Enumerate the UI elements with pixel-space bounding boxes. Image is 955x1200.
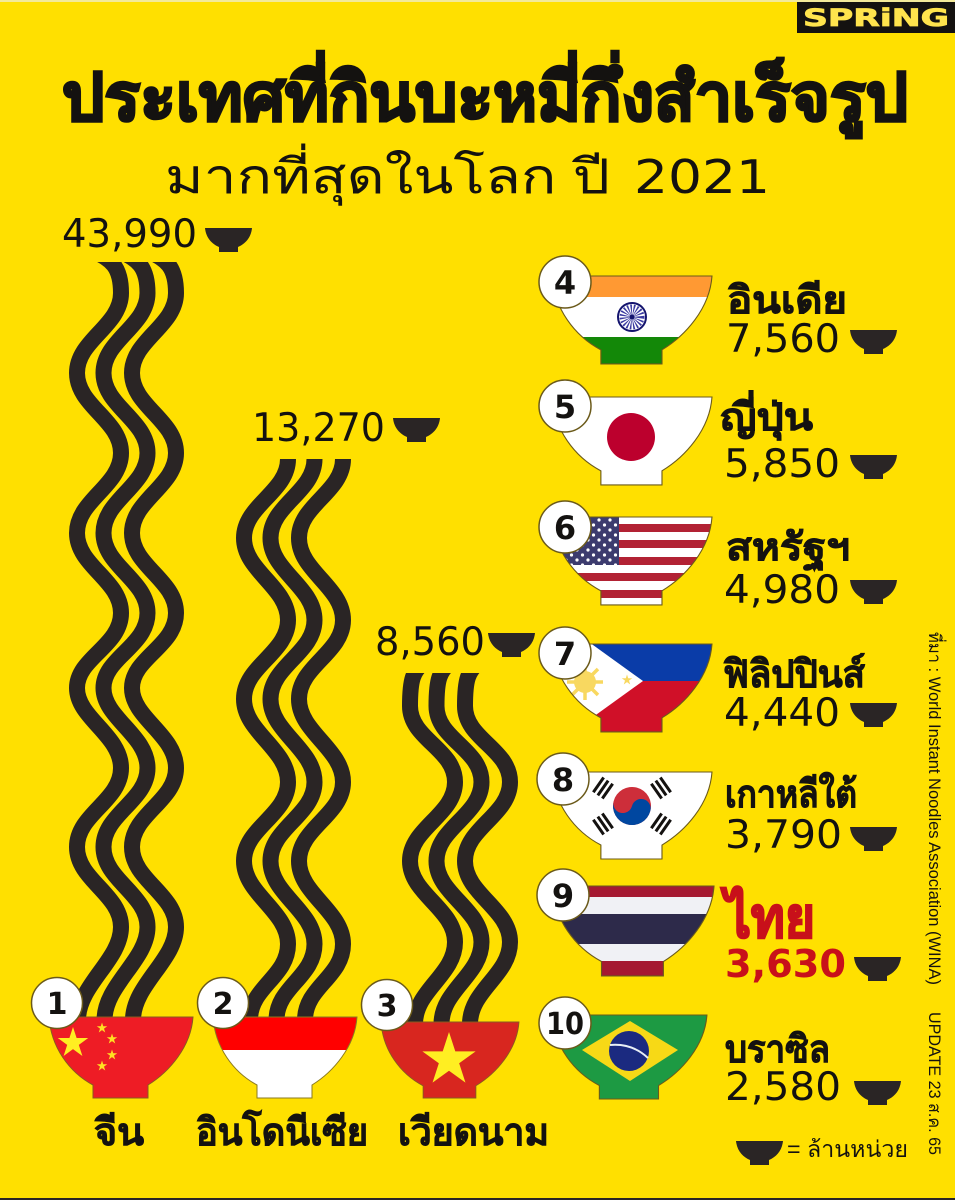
rank 5 xyxy=(539,380,591,432)
rank 9 xyxy=(537,869,589,921)
value: Indonesia 13,270: 13,270 xyxy=(252,406,385,451)
subtitle: 2021 xyxy=(634,150,770,204)
label: United States: สหรัฐฯ xyxy=(726,527,850,572)
value: Brazil 2,580: 2,580 xyxy=(725,1065,841,1110)
bowl: South Korea xyxy=(552,772,712,860)
noodles: Vietnam xyxy=(410,660,510,1024)
value: China 43,990: 43,990 xyxy=(62,212,197,257)
value: South Korea 3,790 xyxy=(725,813,897,858)
rank 3: 3 xyxy=(377,989,397,1024)
source note: UPDATE 23 ส.ค. 65 xyxy=(925,1012,944,1155)
bowl: Brazil xyxy=(552,1015,707,1099)
value: Thailand 3,630: 3,630 xyxy=(725,942,846,986)
value: Vietnam 8,560: 8,560 xyxy=(375,620,485,665)
rank 4: 4 xyxy=(554,264,576,302)
value: Philippines 4,440 xyxy=(724,691,897,736)
bowl: Thailand xyxy=(552,886,714,976)
title: ประเทศที่กินบะหมี่กึ่งสำเร็จรูป xyxy=(62,50,908,139)
rank 8: 8 xyxy=(552,761,574,799)
label: Brazil: บราซิล xyxy=(725,1029,830,1071)
label: Indonesia: อินโดนีเซีย xyxy=(196,1109,368,1154)
rank 7: 7 xyxy=(554,635,576,673)
logo: SPRING xyxy=(797,2,955,33)
bowl: United States xyxy=(552,517,712,605)
legend: bowl equals million units xyxy=(736,1136,908,1165)
value: Philippines 4,440: 4,440 xyxy=(724,691,840,736)
legend: bowl equals million units: = ล้านหน่วย xyxy=(787,1136,908,1162)
label: South Korea: เกาหลีใต้ xyxy=(725,772,857,816)
rank 1 xyxy=(32,978,82,1028)
label: India: อินเดีย xyxy=(727,280,847,322)
value: United States 4,980: 4,980 xyxy=(724,568,840,613)
source note: ที่มา : World Instant Noodles Association (WINA) xyxy=(925,632,947,985)
value: Japan 5,850 xyxy=(724,442,897,487)
label: Thailand: ไทย xyxy=(720,885,815,949)
value: Vietnam 8,560 xyxy=(375,620,535,665)
rank 4 xyxy=(539,256,591,308)
bowl: Japan xyxy=(552,397,712,485)
value: Brazil 2,580 xyxy=(725,1065,901,1110)
value: India 7,560 xyxy=(726,317,897,362)
value: Thailand 3,630 xyxy=(725,942,901,986)
value: India 7,560: 7,560 xyxy=(726,317,840,362)
label: Philippines: ฟิลิปปินส์ xyxy=(723,653,866,696)
subtitle: มากที่สุดในโลก ปี xyxy=(165,143,610,206)
value: Japan 5,850: 5,850 xyxy=(724,442,840,487)
rank 6: 6 xyxy=(554,509,576,547)
subtitle xyxy=(165,143,770,206)
rank 2 xyxy=(198,978,248,1028)
bowl: Philippines xyxy=(562,644,713,732)
rank 6 xyxy=(539,501,591,553)
bowl: Indonesia xyxy=(213,1017,357,1098)
rank 10 xyxy=(539,997,591,1049)
noodles: Indonesia xyxy=(244,459,343,1020)
value: South Korea 3,790: 3,790 xyxy=(725,813,842,858)
noodles: China xyxy=(77,248,176,1020)
rank 1: 1 xyxy=(47,987,67,1022)
rank 2: 2 xyxy=(213,987,233,1022)
rank 3 xyxy=(362,980,412,1030)
rank 5: 5 xyxy=(554,388,576,426)
label: China: จีน xyxy=(94,1112,144,1154)
logo: SPRING: SPRiNG xyxy=(803,4,949,32)
bowl: Vietnam xyxy=(381,1022,519,1098)
label: Vietnam: เวียดนาม xyxy=(398,1112,549,1154)
rank 8 xyxy=(537,753,589,805)
rank 7 xyxy=(539,627,591,679)
bowl: India xyxy=(552,276,712,364)
value: United States 4,980 xyxy=(724,568,897,613)
rank 9: 9 xyxy=(552,877,574,915)
rank 10: 10 xyxy=(546,1007,584,1042)
label: Japan: ญี่ปุ่น xyxy=(720,390,813,441)
source note xyxy=(925,632,947,1155)
bowl: China xyxy=(49,1017,193,1098)
